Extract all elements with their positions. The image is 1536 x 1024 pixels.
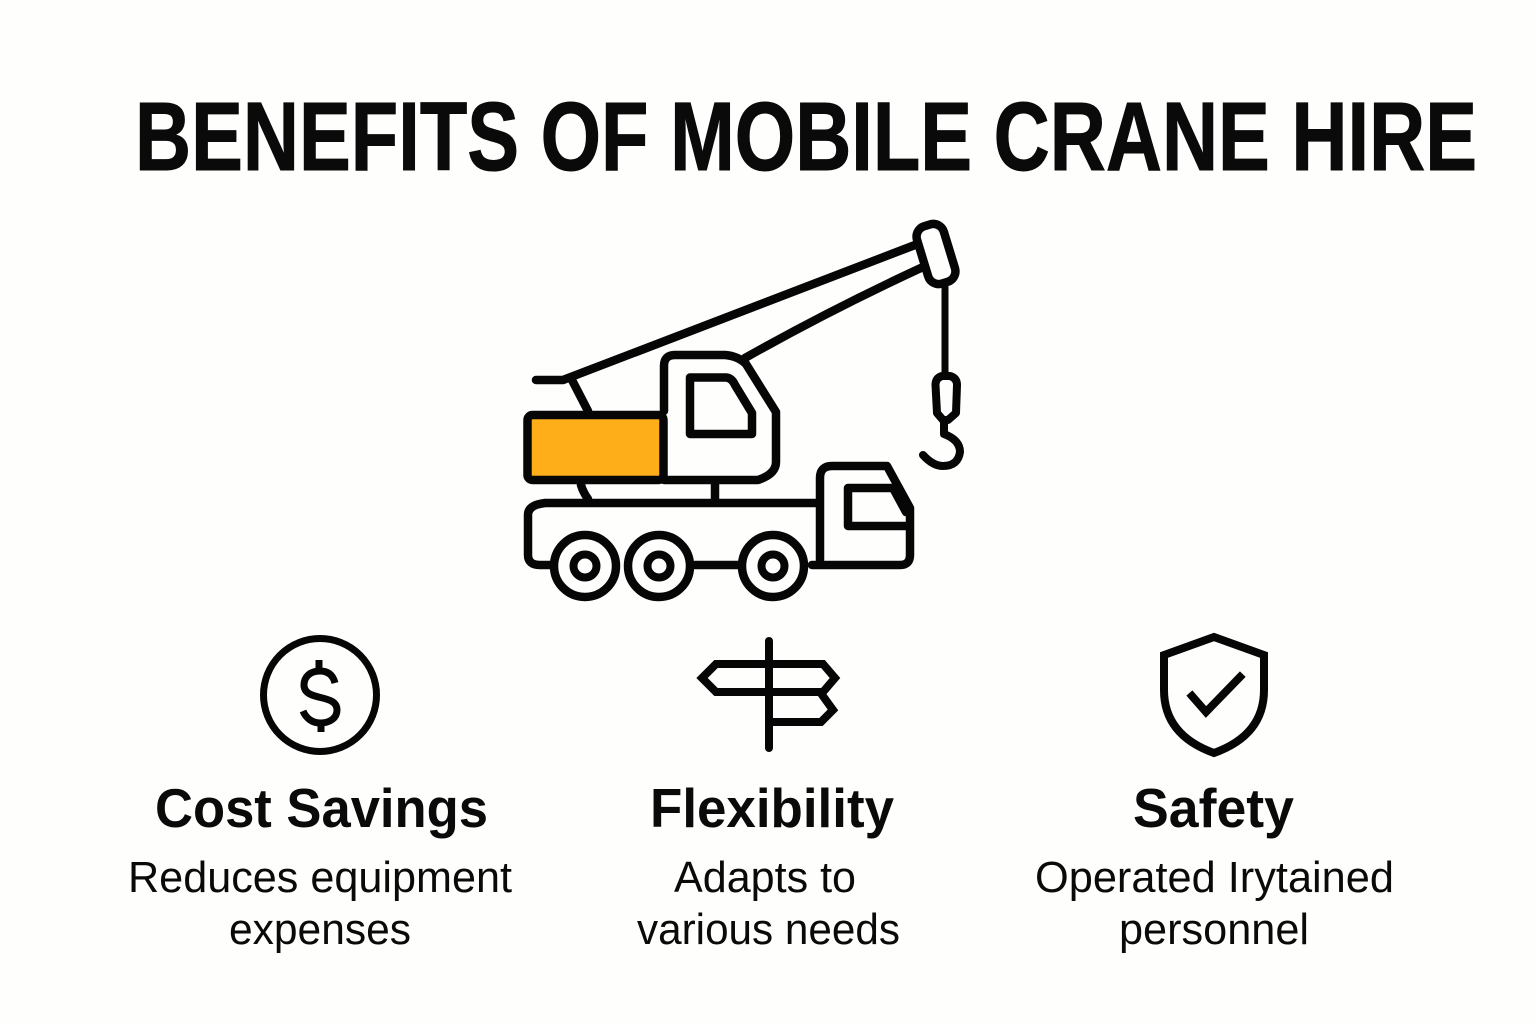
description: cost savings — [128, 853, 512, 954]
description: cost savings: expenses — [229, 905, 411, 954]
description: flexibility: Adapts to — [674, 853, 856, 902]
heading: flexibility: Flexibility — [650, 777, 894, 839]
cab window — [690, 378, 752, 434]
description: safety — [1035, 853, 1394, 954]
illustration: mobile crane truck — [528, 221, 960, 597]
heading: safety: Safety — [1133, 777, 1294, 839]
panel: flexibility — [637, 641, 900, 954]
truck cab — [812, 466, 910, 565]
truck window — [848, 488, 906, 526]
description: safety: Operated Irytained — [1035, 853, 1394, 902]
heading: cost savings: Cost Savings — [155, 777, 488, 839]
counterweight in orange — [528, 415, 664, 480]
panel: safety — [1035, 637, 1394, 954]
description: safety: personnel — [1119, 905, 1309, 954]
hoist rope and hook — [942, 287, 948, 372]
wheels — [554, 535, 804, 597]
icon: shield with check — [1164, 637, 1264, 753]
truck chassis — [528, 503, 816, 565]
boom head — [914, 221, 958, 287]
icon: dollar coin — [264, 638, 376, 752]
icon: signpost — [702, 641, 835, 748]
description: flexibility — [637, 853, 900, 954]
panel: cost savings — [128, 638, 512, 954]
crane boom — [536, 245, 923, 499]
operator cab — [664, 355, 776, 480]
description: cost savings: Reduces equipment — [128, 853, 512, 902]
description: flexibility: various needs — [637, 905, 900, 954]
